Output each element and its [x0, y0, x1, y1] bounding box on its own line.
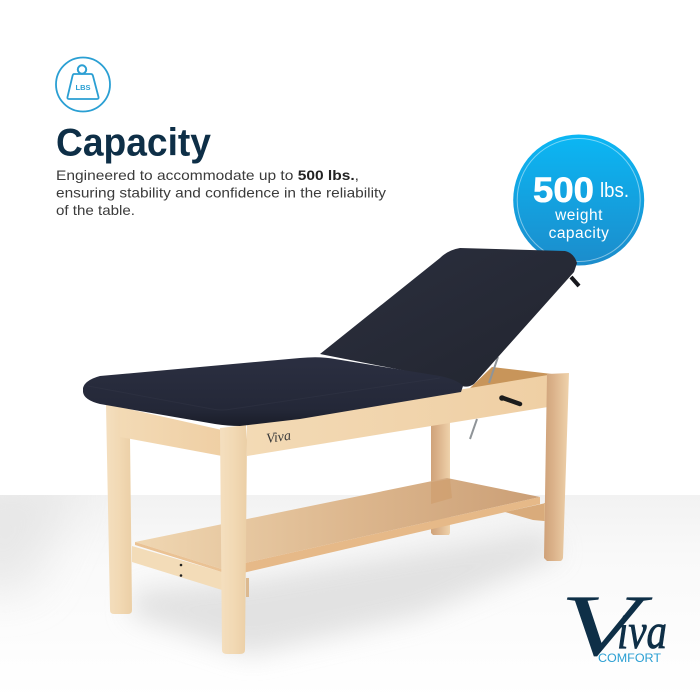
badge: 500 lbs weight capacity: capacity	[549, 225, 609, 242]
front corner leg	[220, 425, 247, 654]
seat cushion	[83, 357, 463, 426]
backrest cushion	[320, 248, 577, 387]
logo: Viva Comfort	[560, 578, 667, 675]
massage table	[83, 248, 579, 654]
rail brand mark: Viva	[265, 429, 292, 447]
logo tagline: COMFORT	[598, 653, 661, 665]
right front leg	[544, 373, 569, 561]
lower shelf	[135, 478, 540, 578]
badge: 500 lbs weight capacity	[513, 134, 644, 266]
seat front crease	[88, 378, 440, 410]
back inner leg	[431, 422, 450, 535]
logo wordmark: V	[560, 578, 654, 675]
crank handle	[499, 395, 520, 404]
left crossbar	[132, 542, 249, 597]
left side rail	[120, 407, 222, 456]
logo wordmark: iva	[617, 603, 667, 659]
badge: 500 lbs weight capacity: 500	[533, 171, 594, 210]
backrest latch	[571, 277, 579, 286]
front long rail	[247, 375, 548, 456]
description text: of the table.	[56, 202, 135, 218]
description text: Engineered to accommodate up to 500 lbs. ,	[56, 167, 359, 183]
description text: ensuring stability and confidence in the reliability	[56, 184, 386, 200]
floor shadow under table	[130, 530, 560, 655]
left rear leg	[106, 405, 132, 614]
inner back rail	[470, 367, 552, 388]
icon: weight with LBS	[56, 58, 110, 112]
support rod	[470, 357, 498, 439]
badge: 500 lbs weight capacity: lbs.	[600, 180, 629, 202]
logo wordmark	[560, 578, 667, 675]
floor backdrop	[0, 495, 700, 606]
badge: 500 lbs weight capacity: weight	[554, 207, 603, 224]
title: Capacity	[56, 122, 212, 164]
right crossbar	[505, 503, 553, 521]
icon: weight with LBS: LBS	[76, 83, 90, 92]
description text	[56, 167, 386, 218]
